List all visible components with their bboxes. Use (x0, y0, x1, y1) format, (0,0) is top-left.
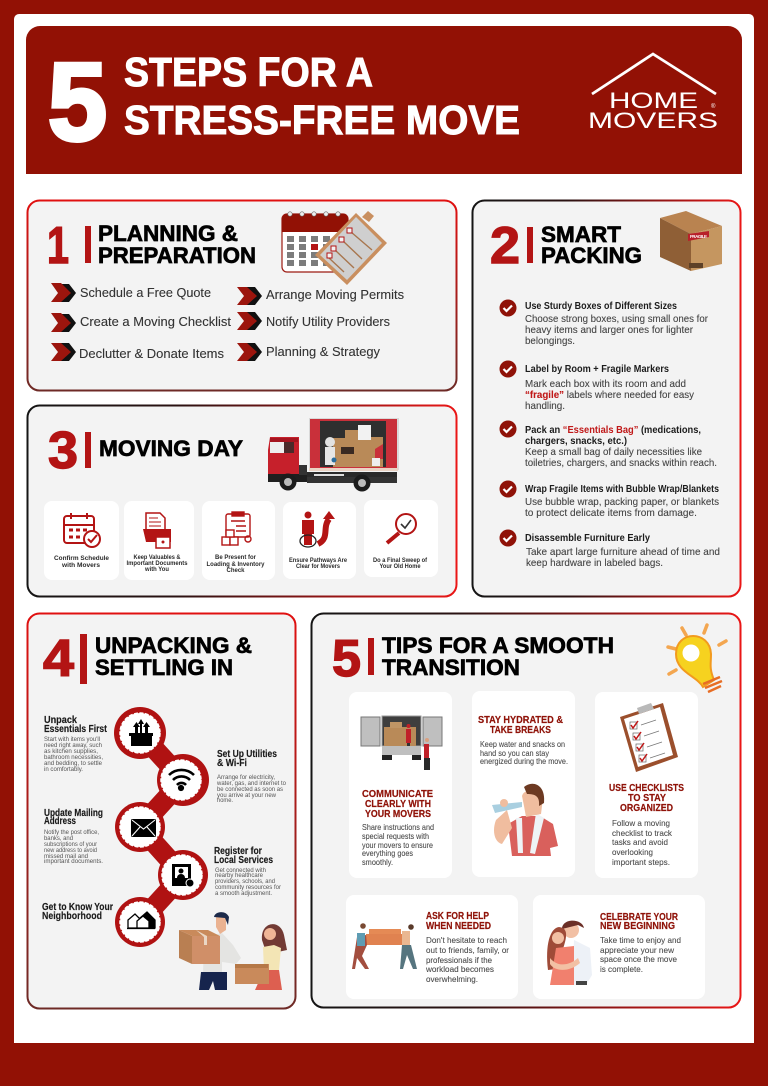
icon: person with path (300, 511, 335, 547)
packing list text: Wrap Fragile Items with Bubble Wrap/Blankets (525, 483, 719, 495)
checklist text (79, 286, 404, 361)
icon: houses (127, 912, 155, 928)
tip text: hydrated: energized during the move. (480, 756, 568, 766)
checklist text: Declutter & Donate Items (79, 347, 224, 361)
panel 5: tips for a smooth transition (312, 614, 740, 1008)
step text: utilities: be connected as soon as (217, 786, 283, 793)
tip text: ask for help (425, 911, 509, 984)
packing list text: heavy items and larger ones for lighter (525, 324, 693, 336)
icon: box with arrows (129, 719, 153, 746)
heading: SMART (541, 222, 621, 247)
icon: fragile box (660, 211, 722, 271)
step text: utilities: water, gas, and internet to (216, 780, 287, 787)
tip text: communicate: CLEARLY WITH (365, 799, 431, 810)
heading: MOVING DAY (99, 436, 243, 461)
packing list text: toiletries, chargers, and snacks within reach. (525, 457, 717, 469)
tip text: ask for help: out to friends, family, or (426, 945, 509, 955)
packing list text: Use Sturdy Boxes of Different Sizes (525, 300, 677, 312)
tip text: hydrated: STAY HYDRATED & (478, 715, 563, 726)
step text: utilities: Set Up Utilities (217, 749, 277, 760)
big number five: 5 (48, 41, 107, 164)
logo: home movers: ® (711, 103, 716, 110)
step text: local services: Register for (214, 846, 262, 857)
heading (541, 222, 642, 268)
panel 3: moving day (28, 406, 456, 596)
packing list text: Use bubble wrap, packing paper, or blankets (525, 496, 719, 508)
card text: confirm schedule (54, 555, 109, 569)
icon: calendar (282, 212, 348, 272)
tip text: communicate: your movers to ensure (362, 840, 433, 850)
packing list text: Disassemble Furniture Early (525, 532, 650, 544)
checklist text: Arrange Moving Permits (266, 288, 404, 302)
step text: utilities: & Wi-Fi (217, 758, 247, 769)
icon: light bulb (668, 625, 726, 692)
icon: envelope (131, 819, 156, 837)
packing list text: chargers, snacks, etc.) (525, 435, 627, 447)
checklist text: Notify Utility Providers (266, 315, 390, 329)
card text: final sweep: Your Old Home (380, 563, 421, 570)
tip text: communicate: YOUR MOVERS (365, 809, 431, 820)
tip text: checklists: checklist to track (612, 828, 673, 838)
packing list text: Mark each box with its room and add (525, 378, 686, 390)
step cards (44, 500, 438, 580)
number 2: 2 (490, 217, 520, 275)
icon: clipboard (315, 211, 387, 285)
tip text: checklists: ORGANIZED (620, 803, 673, 814)
checklist arrows (51, 283, 262, 361)
step text: local services: Local Services (214, 855, 273, 866)
tip text: celebrate (600, 912, 681, 974)
packing list text: belongings. (525, 335, 575, 347)
step text: mailing address: subscriptions of your (44, 841, 97, 848)
tip text: ask for help: professionals if the (426, 955, 492, 965)
tip text: ask for help: WHEN NEEDED (426, 921, 491, 932)
step text: unpack essentials: in comfortably. (44, 766, 83, 773)
card text: confirm schedule: with Movers (61, 562, 100, 569)
card text: be present (206, 554, 265, 574)
step text: mailing address: Address (44, 816, 76, 827)
heading: PREPARATION (98, 243, 256, 268)
number 1: 1 (47, 217, 69, 275)
card text: valuables: Important Documents (126, 560, 188, 567)
illustration: couple carrying boxes (179, 912, 287, 990)
heading (98, 221, 256, 268)
tip cards background (346, 691, 705, 999)
step text: local services: Get connected with (215, 867, 267, 874)
illustration: movers carrying sofa (352, 923, 417, 969)
tip text: ask for help: workload becomes (425, 964, 494, 974)
step text: local services: providers, schools, and (215, 878, 276, 885)
icon: magnifier (387, 514, 416, 543)
heading (382, 633, 614, 680)
icon: wifi (169, 770, 194, 790)
tip text: celebrate: CELEBRATE YOUR (600, 912, 679, 923)
packing list text: Pack an “Essentials Bag” (medications, (525, 424, 701, 436)
icon: id document (172, 864, 194, 887)
step text: mailing address: missed mail and (44, 853, 89, 860)
panel 4: unpacking and settling in (28, 614, 296, 1008)
card text: valuables (126, 554, 188, 573)
card text: confirm schedule: Confirm Schedule (54, 555, 109, 562)
heading: TIPS FOR A SMOOTH (382, 633, 614, 658)
heading: PACKING (541, 243, 642, 268)
tip text: communicate: everything goes (362, 848, 413, 858)
card text: final sweep: Do a Final Sweep of (373, 557, 428, 564)
step text: local services: community resources for (215, 884, 281, 891)
tip text: checklists: USE CHECKLISTS (609, 783, 684, 794)
tip text: checklists: important steps. (612, 857, 670, 867)
tip text: communicate: Share instructions and (362, 822, 434, 832)
card text: pathways (289, 557, 347, 570)
tip text: checklists: TO STAY (628, 793, 666, 804)
step text: mailing address: Notify the post office, (44, 829, 99, 836)
tip text: communicate (362, 789, 434, 867)
title: STRESS-FREE MOVE (124, 97, 520, 143)
card text: pathways: Clear for Movers (296, 563, 340, 570)
tip text: celebrate: NEW BEGINNING (600, 921, 675, 932)
tip text: checklists: tasks and avoid (612, 837, 668, 847)
number 4: 4 (43, 630, 74, 688)
step text: local services: a smooth adjustment. (215, 890, 272, 897)
tip text: celebrate: appreciate your new (600, 945, 675, 955)
heading: SETTLING IN (95, 655, 233, 680)
tip text: hydrated: Keep water and snacks on (480, 739, 565, 749)
step text: unpack essentials: as kitchen supplies, (44, 748, 98, 755)
packing list text: Keep a small bag of daily necessities like (525, 446, 702, 458)
tip text: checklists: overlooking (612, 847, 653, 857)
tip text: communicate: special requests with (362, 831, 429, 841)
step text: mailing address: new address to avoid (44, 847, 97, 854)
illustration: checklist clipboard (620, 703, 678, 772)
step text: utilities (216, 749, 287, 804)
panel 2: smart packing (472, 200, 740, 596)
timeline circles (114, 707, 209, 947)
heading: TRANSITION (382, 655, 520, 680)
tip text: checklists (609, 783, 684, 867)
step text: unpack essentials: Start with items you'll (44, 736, 100, 743)
step text: unpack essentials: Essentials First (44, 724, 108, 735)
step text: unpack essentials: Unpack (44, 715, 77, 726)
card text: pathways: Ensure Pathways Are (289, 557, 347, 564)
icon: inventory clipboard and boxes (222, 512, 251, 545)
packing list text: to protect delicate items from damage. (525, 507, 697, 519)
step text: mailing address (44, 808, 103, 865)
card text: be present: Loading & Inventory (206, 561, 265, 568)
number 3: 3 (48, 422, 78, 480)
packing list text: Choose strong boxes, using small ones for (525, 313, 708, 325)
tip text: communicate: COMMUNICATE (362, 789, 433, 800)
card text: valuables: with You (144, 566, 169, 573)
step text: utilities: you arrive at your new (217, 792, 277, 799)
check icons (500, 300, 516, 546)
step text: utilities: Arrange for electricity, (217, 774, 275, 781)
illustration: man drinking water (492, 784, 558, 856)
icon: documents folder with lock (143, 513, 171, 548)
heading (95, 633, 252, 680)
tip text: celebrate: space once the move (600, 954, 677, 964)
tip text: communicate: smoothly. (362, 857, 393, 867)
card text: be present: Check (226, 567, 245, 574)
tip text: ask for help: ASK FOR HELP (426, 911, 489, 922)
tip text: hydrated: hand so you can stay (480, 748, 550, 758)
tip text: checklists: Follow a moving (612, 818, 670, 828)
step text: unpack essentials: need right away, such (44, 742, 103, 749)
step text: mailing address: Update Mailing (44, 808, 103, 819)
step text: mailing address: banks, and (44, 835, 74, 842)
tip text: ask for help: overwhelming. (426, 974, 478, 984)
checklist text: Planning & Strategy (266, 345, 381, 359)
packing list text: Take apart large furniture ahead of time and (526, 546, 720, 558)
checklist text: Create a Moving Checklist (80, 315, 232, 329)
title (124, 49, 520, 143)
step text: mailing address: important documents. (44, 858, 103, 865)
step text: local services: nearby healthcare (215, 872, 264, 879)
step text: unpack essentials: bathroom necessities, (44, 754, 103, 761)
title: STEPS FOR A (124, 49, 373, 95)
illustration: embracing couple (547, 921, 592, 985)
step text: utilities: home. (217, 797, 233, 804)
card text: final sweep (373, 557, 428, 570)
header banner (26, 26, 742, 174)
logo: home movers (588, 54, 718, 133)
packing list text: keep hardware in labeled bags. (526, 557, 663, 569)
checklist text: Schedule a Free Quote (80, 286, 211, 300)
panel 1: planning and preparation (28, 200, 456, 390)
step text: neighborhood: Get to Know Your (42, 902, 113, 913)
card text: valuables: Keep Valuables & (134, 554, 181, 561)
heading: PLANNING & (98, 221, 238, 246)
packing list text: “fragile” labels where needed for easy (525, 389, 695, 401)
step text: neighborhood (42, 902, 113, 922)
step text: unpack essentials (44, 715, 108, 773)
truck (268, 418, 399, 492)
packing list text (525, 300, 720, 569)
packing list text: handling. (525, 400, 565, 412)
logo: home movers: HOME (609, 88, 698, 113)
icon: fragile box: FRAGILE (690, 234, 707, 239)
tip text: hydrated (478, 715, 568, 766)
step text: unpack essentials: and bedding, to settle (44, 760, 103, 767)
icon: schedule calendar (64, 513, 100, 547)
step text: neighborhood: Neighborhood (42, 911, 102, 922)
tip text: celebrate: Take time to enjoy and (600, 935, 681, 945)
tip text: celebrate: is complete. (600, 964, 643, 974)
illustration: open truck with movers (361, 716, 442, 770)
heading: UNPACKING & (95, 633, 252, 658)
logo: home movers: MOVERS (588, 108, 718, 133)
packing list text: Label by Room + Fragile Markers (525, 363, 669, 375)
step text: local services (214, 846, 281, 897)
number 5: 5 (332, 630, 361, 688)
tip text: ask for help: Don't hesitate to reach (426, 935, 507, 945)
card text: be present: Be Present for (215, 554, 256, 561)
tip text: hydrated: TAKE BREAKS (490, 725, 551, 736)
